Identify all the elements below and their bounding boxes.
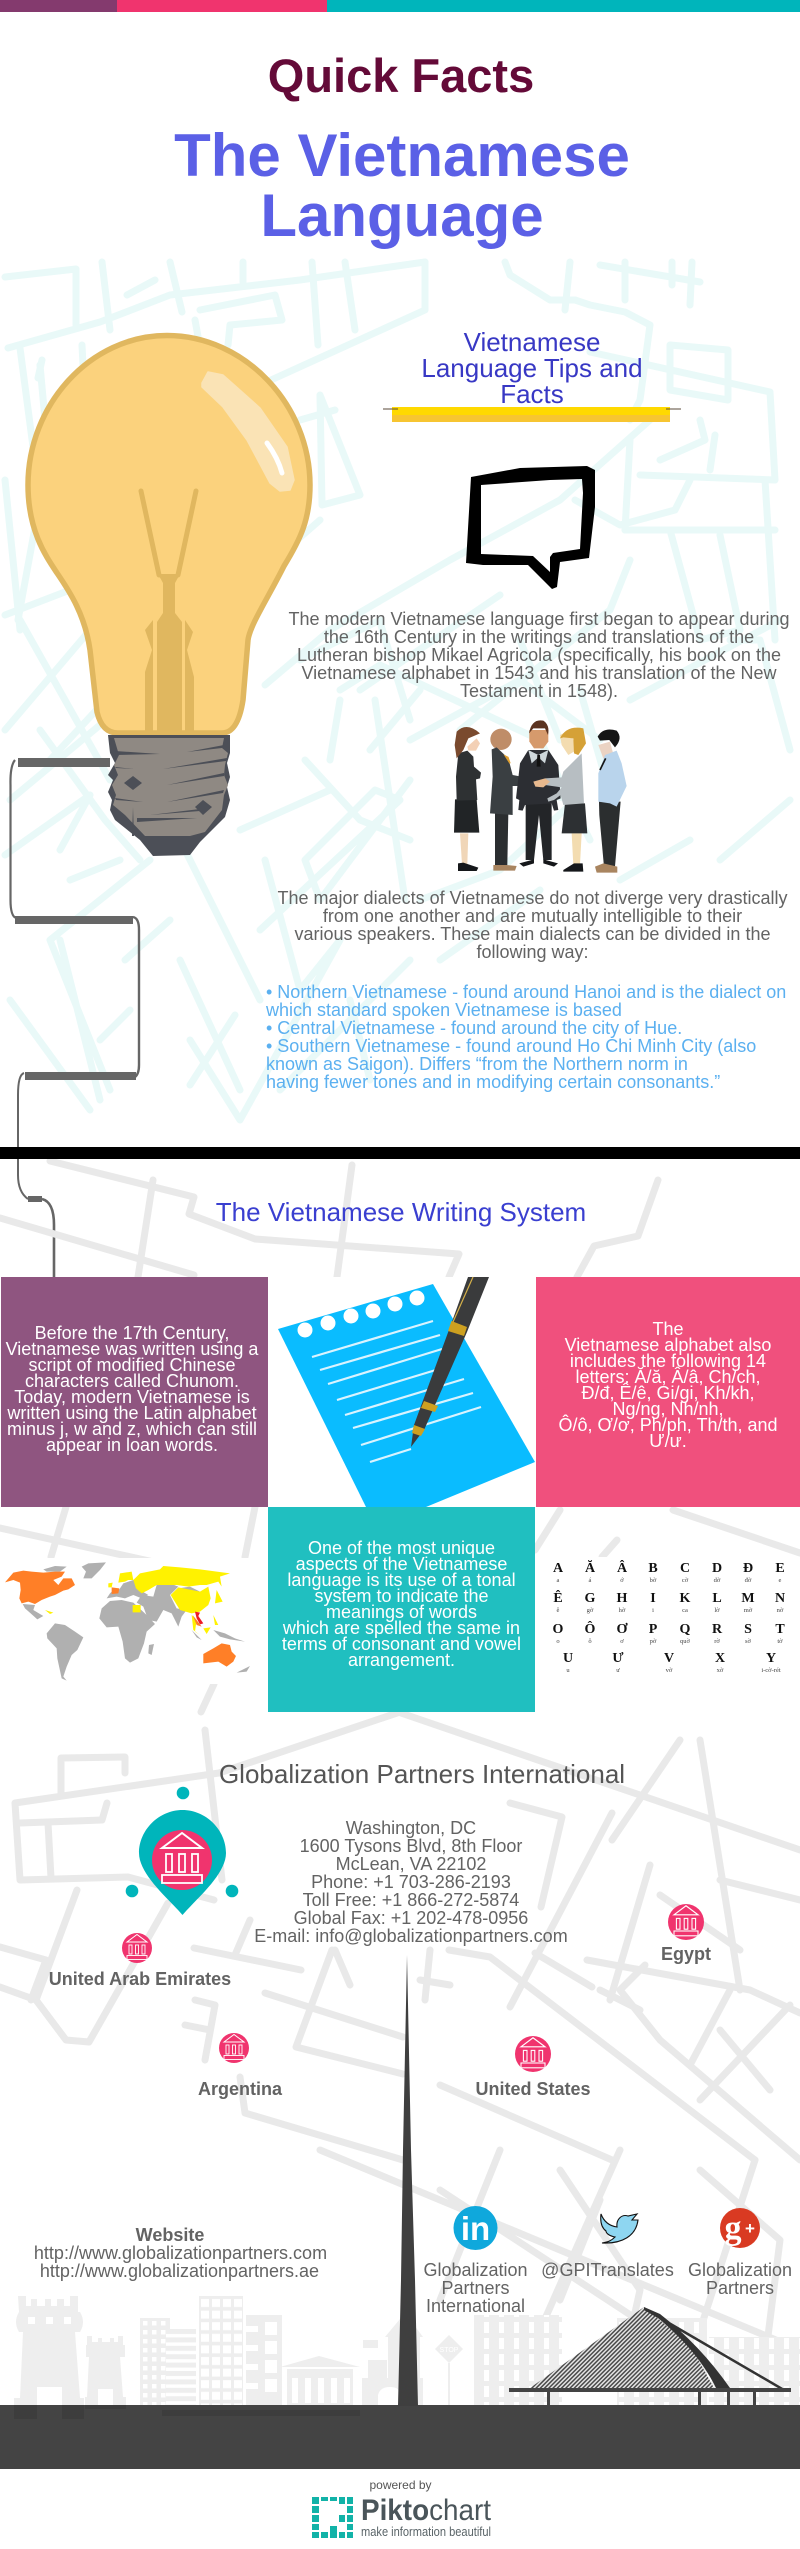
text: website: Website [136, 2225, 204, 2245]
social: LinkedIn [423, 2206, 528, 2316]
panel: Vietnamese alphabet chart: C [680, 1561, 690, 1576]
text: dialects paragraph: from one another and are mutually intelligible to their [323, 906, 742, 926]
panel: Vietnamese alphabet chart: Ô [585, 1620, 596, 1637]
panel: Vietnamese alphabet chart: H [617, 1591, 628, 1606]
panel: Vietnamese alphabet chart: i [652, 1607, 654, 1614]
panel: Vietnamese alphabet chart: dờ [714, 1577, 721, 1584]
bald man [490, 729, 532, 871]
panel: pink alphabet text: Đ/đ, Ê/ê, Gi/gi, Kh/kh, [581, 1383, 755, 1403]
footer: powered by Piktochart: make information beautiful [361, 2525, 491, 2539]
panel: Vietnamese alphabet chart: E [775, 1561, 785, 1576]
bulb glass [28, 336, 310, 733]
text: dialects paragraph: The major dialects of Vietnamese do not diverge very drastically [278, 888, 787, 908]
apartment blocks [140, 2318, 170, 2405]
panel: Vietnamese alphabet chart: B [648, 1561, 658, 1576]
panel: world map [0, 1558, 268, 1684]
blonde woman [533, 728, 587, 872]
social: Google Plus: g [724, 2210, 742, 2247]
text: website: http://www.globalizationpartners.com [34, 2243, 327, 2263]
social: Twitter [541, 2214, 674, 2280]
small castle tower [85, 2336, 126, 2409]
title: Quick Facts: Quick Facts [268, 49, 534, 102]
temple [280, 2356, 360, 2405]
panel: Vietnamese alphabet chart: ê [557, 1607, 560, 1614]
panel: Vietnamese alphabet chart: gờ [587, 1607, 594, 1614]
text: dialect list: • Southern Vietnamese - found around Ho Chi Minh City (also [266, 1036, 756, 1056]
panel: Vietnamese alphabet chart: ô [588, 1638, 592, 1645]
panel: pink alphabet text: The [652, 1319, 684, 1339]
large castle tower [14, 2296, 84, 2419]
church and small castle [362, 2313, 423, 2405]
panel: Vietnamese alphabet chart: o [556, 1638, 560, 1645]
panel: Vietnamese alphabet chart: Q [680, 1622, 691, 1637]
location: United States [475, 2036, 591, 2099]
panel: Vietnamese alphabet chart: U [563, 1651, 573, 1666]
teal street map background [5, 262, 790, 1120]
footer: powered by Piktochart: powered by [369, 2478, 432, 2492]
social: Google Plus [688, 2208, 792, 2298]
spire monument [398, 1955, 418, 2406]
text: address: Global Fax: +1 202-478-0956 [294, 1908, 528, 1928]
heading: Vietnamese Language Tips and Facts: Vietnamese [464, 327, 600, 357]
panel: Vietnamese alphabet chart: u [566, 1667, 570, 1674]
social: Google Plus: Globalization [688, 2260, 792, 2280]
text: history paragraph: The modern Vietnamese language first began to appear during [288, 609, 790, 629]
panel: Vietnamese alphabet chart: V [664, 1651, 674, 1666]
panel: pink alphabet text: letters: Ă/ă, Â/â, Ch/ch, [575, 1367, 761, 1387]
panel: purple Chunom text: script of modified Chinese [28, 1355, 236, 1375]
panel: teal tonal system text: which are spelled the same in [282, 1618, 520, 1638]
panel: teal tonal system text: arrangement. [348, 1650, 455, 1670]
panel: Vietnamese alphabet chart: A [553, 1561, 564, 1576]
location: Argentina [198, 2033, 283, 2099]
text: history paragraph: Testament in 1548). [460, 681, 618, 701]
black divider bar [0, 1147, 800, 1159]
grey street map background [0, 1161, 800, 2400]
pen [411, 1277, 489, 1447]
title: The Vietnamese Language: The Vietnamese [174, 122, 630, 189]
filament [141, 491, 196, 575]
icon: large location pin [126, 1787, 238, 1915]
heading: Vietnamese Language Tips and Facts: Language Tips and [421, 353, 643, 383]
panel: Vietnamese alphabet chart: Đ [743, 1561, 753, 1576]
heading: Globalization Partners International: Globalization Partners International [219, 1759, 625, 1789]
location: Egypt: Egypt [661, 1944, 711, 1964]
man in blue shirt [595, 730, 627, 873]
panel: Vietnamese alphabet chart: ca [682, 1607, 688, 1614]
yellow underline bar [383, 407, 681, 422]
stop sign [435, 2335, 463, 2405]
panel: Vietnamese alphabet chart: vờ [666, 1667, 673, 1674]
panel: Vietnamese alphabet chart: nờ [777, 1607, 784, 1614]
panel: Vietnamese alphabet chart [535, 1557, 800, 1712]
panel: teal tonal system text: language is its use of a tonal [287, 1570, 516, 1590]
notebook rings [298, 1290, 424, 1338]
text: address: E-mail: info@globalizationpartners.com [254, 1926, 568, 1946]
illustration: five business people [454, 720, 627, 873]
top colour bar [0, 0, 800, 12]
panel: Vietnamese alphabet chart: mờ [744, 1607, 753, 1614]
panel: Vietnamese alphabet chart: Ê [553, 1589, 563, 1606]
icon: speech bubble [466, 466, 595, 589]
text: history paragraph: Vietnamese alphabet in 1543 and his translation of the New [302, 663, 777, 683]
text: history paragraph [288, 609, 790, 701]
location: Argentina: Argentina [198, 2079, 283, 2099]
panel: Vietnamese alphabet chart: N [775, 1591, 785, 1606]
text: dialect list: • Northern Vietnamese - found around Hanoi and is the dialect on [266, 982, 786, 1002]
panel: purple Chunom text: appear in loan words. [46, 1435, 218, 1455]
city skyline: STOP [440, 2347, 459, 2354]
panel: Vietnamese alphabet chart: D [712, 1561, 722, 1576]
panel: Vietnamese alphabet chart: R [712, 1622, 723, 1637]
panel: Vietnamese alphabet chart: M [741, 1591, 755, 1606]
panel: purple Chunom text: minus j, w and z, which can still [7, 1419, 257, 1439]
panel: Vietnamese alphabet chart: a [557, 1577, 560, 1584]
logo mark [312, 2497, 353, 2538]
panel: Vietnamese alphabet chart: Y [766, 1651, 776, 1666]
social: LinkedIn: Globalization [423, 2260, 528, 2280]
panel: Vietnamese alphabet chart: O [553, 1622, 564, 1637]
panel: Vietnamese alphabet chart: ư [616, 1667, 620, 1674]
panel: Vietnamese alphabet chart: đờ [745, 1577, 752, 1584]
heading: Vietnamese Language Tips and Facts: Facts [500, 379, 564, 409]
text: dialect list: • Central Vietnamese - found around the city of Hue. [266, 1018, 682, 1038]
panel: purple Chunom text: characters called Chunom. [25, 1371, 239, 1391]
notebook [278, 1284, 535, 1507]
social: LinkedIn: International [426, 2296, 525, 2316]
panel: Vietnamese alphabet chart: lờ [714, 1607, 720, 1614]
panel: Vietnamese alphabet chart: sờ [745, 1638, 752, 1645]
text: address [254, 1818, 568, 1946]
panel: pink alphabet text: Ô/ô, Ơ/ơ, Ph/ph, Th/th, and [558, 1414, 778, 1435]
panel: Vietnamese alphabet chart: G [585, 1591, 596, 1606]
text: website [34, 2225, 327, 2281]
right blocks [474, 2315, 562, 2405]
orange countries [5, 1571, 236, 1667]
panel: Vietnamese alphabet chart: T [775, 1622, 785, 1637]
panel: Vietnamese alphabet chart: quờ [680, 1638, 691, 1645]
wire from bulb [10, 760, 139, 1278]
panel: Vietnamese alphabet chart: ơ [620, 1638, 624, 1645]
panel: pink alphabet text: Ư/ư. [649, 1431, 687, 1451]
social: Google Plus: Partners [706, 2278, 774, 2298]
title: The Vietnamese Language: Language [260, 182, 544, 249]
panel: Vietnamese alphabet chart: S [744, 1622, 752, 1637]
panel: Vietnamese alphabet chart: bờ [650, 1577, 657, 1584]
footer: powered by Piktochart: Piktochart [361, 2494, 492, 2527]
grey countries [23, 1562, 250, 1681]
panel: Vietnamese alphabet chart: Â [617, 1559, 628, 1576]
panel: Vietnamese alphabet chart: Ư [612, 1651, 624, 1666]
panel: Vietnamese alphabet chart: á [589, 1577, 592, 1584]
panel: Vietnamese alphabet chart: cờ [682, 1577, 689, 1584]
panel: teal tonal system text: system to indicate the [314, 1586, 489, 1606]
text: address: Phone: +1 703-286-2193 [311, 1872, 511, 1892]
panel: purple Chunom text [1, 1277, 268, 1507]
panel: teal tonal system text: terms of consonant and vowel [282, 1634, 521, 1654]
panel: Vietnamese alphabet chart: xờ [717, 1667, 724, 1674]
panel: Vietnamese alphabet chart: pờ [650, 1638, 657, 1645]
panel: Vietnamese alphabet chart: hờ [619, 1607, 626, 1614]
screw base [108, 735, 230, 856]
panel: pink alphabet text: includes the following 14 [570, 1351, 766, 1371]
city skyline [14, 2296, 800, 2419]
panel: teal tonal system text [268, 1507, 535, 1712]
text: dialects paragraph [278, 888, 787, 962]
title: The Vietnamese Language [174, 122, 630, 249]
text: address: Washington, DC [346, 1818, 476, 1838]
panel: purple Chunom text: Today, modern Vietnamese is [14, 1387, 250, 1407]
panel: purple Chunom text: Before the 17th Century, [35, 1323, 229, 1343]
panel: Vietnamese alphabet chart: P [649, 1622, 658, 1637]
location: United States: United States [475, 2079, 591, 2099]
illustration: light bulb [28, 336, 310, 856]
footer: powered by Piktochart [312, 2478, 492, 2539]
panel: Vietnamese alphabet chart: rờ [714, 1638, 720, 1645]
glass highlight [202, 372, 294, 491]
panel: Vietnamese alphabet chart: Ă [585, 1559, 596, 1576]
text: dialect list: which standard spoken Vietnamese is based [265, 1000, 622, 1020]
text: address: McLean, VA 22102 [336, 1854, 486, 1874]
social: Google Plus: + [745, 2219, 755, 2238]
location: United Arab Emirates [49, 1933, 231, 1989]
location: United Arab Emirates: United Arab Emirates [49, 1969, 231, 1989]
text: address: 1600 Tysons Blvd, 8th Floor [300, 1836, 522, 1856]
panel: teal tonal system text: aspects of the Vietnamese [296, 1554, 507, 1574]
woman with ponytail [454, 727, 481, 871]
panel: Vietnamese alphabet chart: e [779, 1577, 782, 1584]
text: history paragraph: the 16th Century in the writings and translations of the [324, 627, 754, 647]
panel: Vietnamese alphabet chart: i-cờ-rét [761, 1667, 781, 1674]
social: Twitter: @GPITranslates [541, 2260, 674, 2280]
social: LinkedIn: in [461, 2210, 490, 2247]
location: Egypt [661, 1904, 711, 1964]
bridge [509, 2307, 791, 2405]
text: address: Toll Free: +1 866-272-5874 [303, 1890, 519, 1910]
Vietnam [195, 1612, 203, 1624]
panel: Vietnamese alphabet chart: tờ [777, 1638, 783, 1645]
text: website: http://www.globalizationpartners.ae [40, 2261, 319, 2281]
panel: Vietnamese alphabet chart: K [680, 1591, 691, 1606]
panel: pink alphabet text: Ng/ng, Nh/nh, [612, 1399, 724, 1419]
text: history paragraph: Lutheran bishop Mikael Agricola (specifically, his book on the [297, 645, 781, 665]
panel: notebook and pen illustration [268, 1277, 536, 1507]
social: LinkedIn: Partners [441, 2278, 510, 2298]
ground [0, 2405, 800, 2469]
yellow countries [45, 1566, 230, 1635]
panel: Vietnamese alphabet chart: X [715, 1651, 725, 1666]
text: dialect list: known as Saigon). Differs “from the Northern norm in [266, 1054, 688, 1074]
panel: Vietnamese alphabet chart: ớ [620, 1577, 624, 1584]
text: dialect list: having fewer tones and in modifying certain consonants.” [266, 1072, 720, 1092]
panel: teal tonal system text: meanings of words [326, 1602, 477, 1622]
text: dialects paragraph: following way: [476, 942, 589, 962]
panel: Vietnamese alphabet chart: L [712, 1591, 722, 1606]
panel: teal tonal system text: One of the most unique [308, 1538, 495, 1558]
panel: purple Chunom text: written using the Latin alphabet [6, 1403, 257, 1423]
panel: purple Chunom text: Vietnamese was written using a [6, 1339, 259, 1359]
heading: Vietnamese Language Tips and Facts [421, 327, 643, 409]
panel: Vietnamese alphabet chart: Ơ [617, 1622, 629, 1637]
centre man [516, 720, 561, 867]
notebook lines [312, 1321, 481, 1462]
panel: Vietnamese alphabet chart: I [650, 1591, 656, 1606]
heading: The Vietnamese Writing System: The Vietnamese Writing System [216, 1197, 586, 1227]
text: dialect list [265, 982, 786, 1092]
text: dialects paragraph: various speakers. These main dialects can be divided in the [295, 924, 770, 944]
panel: pink alphabet text [536, 1277, 800, 1507]
panel: pink alphabet text: Vietnamese alphabet also [565, 1335, 771, 1355]
